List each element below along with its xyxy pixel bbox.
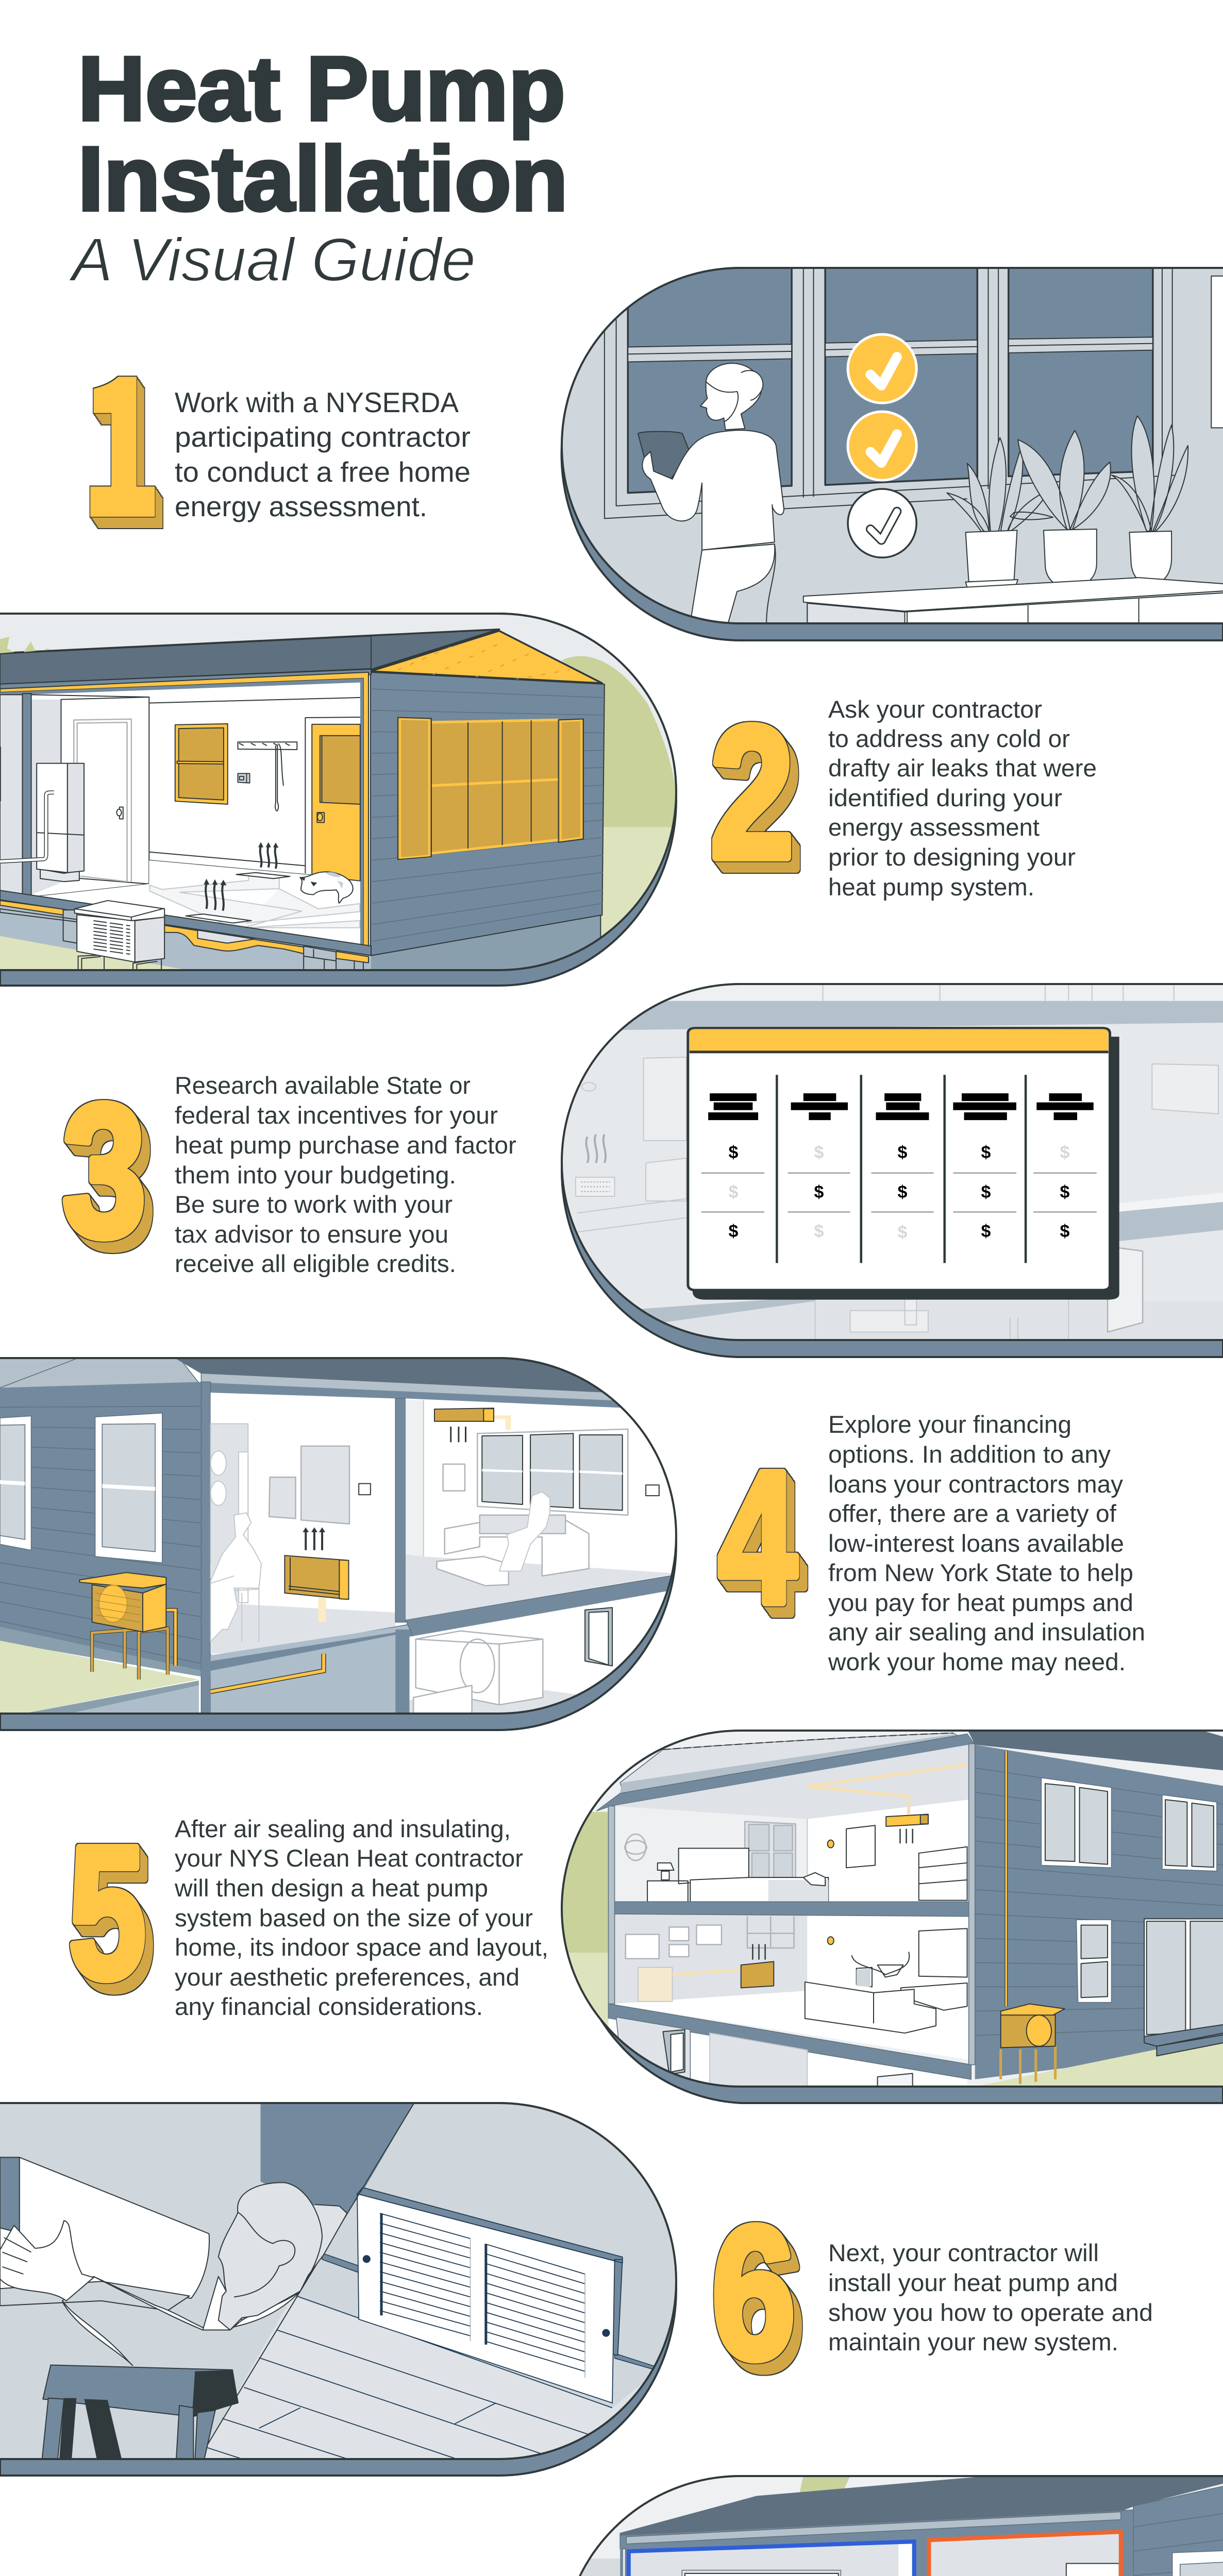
coat rack and thermostat <box>238 742 297 811</box>
console unit <box>284 1555 348 1599</box>
step 4 text: options. In addition to any <box>828 1440 1111 1468</box>
outdoor heat pump unit <box>79 1572 176 1680</box>
facade with siding <box>0 1382 201 1714</box>
roof <box>0 630 602 687</box>
person with tablet <box>638 363 784 647</box>
step 3 text: receive all eligible credits. <box>175 1250 456 1277</box>
step 2 text: energy assessment <box>828 814 1040 841</box>
tax table card <box>688 1028 1119 1300</box>
facade <box>371 672 605 989</box>
step 3 text: Research available State or <box>175 1072 471 1099</box>
step 6 text: Next, your contractor will <box>828 2239 1099 2266</box>
window <box>605 264 1223 518</box>
step 2 text: prior to designing your <box>828 843 1076 871</box>
back wall window <box>175 724 228 804</box>
floor slabs <box>608 1806 971 2094</box>
step 5 text <box>174 1815 548 2020</box>
facade with siding <box>969 1744 1223 2094</box>
title: Installation <box>78 128 568 230</box>
panel: step 4 illustration, financing house <box>0 1350 702 1739</box>
subtitle: A Visual Guide <box>69 226 476 294</box>
step 4 text: you pay for heat pumps and <box>828 1589 1133 1616</box>
step 2 text: heat pump system. <box>828 873 1034 901</box>
right room <box>406 1398 679 1620</box>
dollar signs: $ <box>898 1182 908 1202</box>
step 4 text: offer, there are a variety of <box>828 1500 1117 1527</box>
dollar signs: $ <box>729 1222 739 1241</box>
dollar signs: $ <box>729 1143 739 1162</box>
step 4 text: Explore your financing <box>828 1411 1071 1438</box>
step 1 text <box>175 386 471 522</box>
dollar signs: $ <box>1060 1143 1070 1162</box>
step 6 text: maintain your new system. <box>828 2328 1118 2355</box>
step 1 text: energy assessment. <box>175 490 427 522</box>
dollar signs: $ <box>981 1222 991 1241</box>
table <box>803 577 1223 622</box>
step ladder <box>42 2365 239 2459</box>
step 6 number: 6 <box>712 2188 795 2398</box>
roof edge <box>0 636 371 689</box>
foundation <box>0 890 371 970</box>
floor and ducts <box>31 860 360 944</box>
check marks <box>848 334 916 557</box>
title: Heat Pump <box>78 38 565 140</box>
step 3 text: federal tax incentives for your <box>175 1101 498 1129</box>
step 2 text: Ask your contractor <box>828 696 1042 723</box>
step 2 text: drafty air leaks that were <box>828 754 1097 782</box>
roof edge <box>597 1729 1223 1811</box>
roof <box>620 2477 1223 2549</box>
step 5 text: After air sealing and insulating, <box>175 1815 511 1842</box>
step 2 text: identified during your <box>828 784 1062 811</box>
dollar signs <box>729 1143 1070 1242</box>
step 5 text: any financial considerations. <box>175 1993 483 2020</box>
panel: step 5 illustration, two-storey house <box>546 1729 1223 2108</box>
step 3 text: them into your budgeting. <box>175 1161 456 1189</box>
water heater <box>0 764 84 882</box>
step 4 text <box>828 1411 1145 1675</box>
door <box>312 724 360 881</box>
step 3 text <box>175 1072 516 1277</box>
dollar signs: $ <box>814 1182 824 1202</box>
step 4 text: work your home may need. <box>828 1648 1126 1675</box>
step 4 text: from New York State to help <box>828 1559 1133 1586</box>
panel: step 2 illustration, insulated house <box>0 608 702 989</box>
step 5 text: system based on the size of your <box>175 1904 533 1931</box>
facade <box>1133 2481 1223 2576</box>
dollar signs: $ <box>814 1222 824 1241</box>
dollar signs: $ <box>729 1182 739 1202</box>
step 4 number: 4 <box>718 1433 798 1642</box>
dollar signs: $ <box>1060 1182 1070 1202</box>
step 1 text: Work with a NYSERDA <box>175 386 459 418</box>
step 5 number: 5 <box>69 1807 146 2018</box>
panel: step 6 illustration, installer and vent <box>0 2092 702 2481</box>
dollar signs: $ <box>814 1143 824 1162</box>
upper storey <box>612 1744 969 1902</box>
step 3 text: Be sure to work with your <box>175 1191 453 1218</box>
dollar signs: $ <box>898 1143 908 1162</box>
dollar signs: $ <box>898 1223 908 1242</box>
step 3 number: 3 <box>62 1066 146 1276</box>
step 5 text: your aesthetic preferences, and <box>175 1963 520 1991</box>
potted plants <box>947 416 1188 594</box>
floor <box>187 2296 679 2481</box>
step 3 text: heat pump purchase and factor <box>175 1131 516 1159</box>
exterior windows <box>0 1413 162 1563</box>
step 5 text: will then design a heat pump <box>174 1874 488 1902</box>
step 5 text: your NYS Clean Heat contractor <box>175 1844 523 1872</box>
step 4 text: any air sealing and insulation <box>828 1618 1145 1646</box>
step 1 text: to conduct a free home <box>175 456 471 488</box>
step 6 text: show you how to operate and <box>828 2299 1153 2326</box>
refrigerant pipe and outdoor unit <box>1001 1751 1065 2084</box>
dog <box>300 872 353 903</box>
step 1 number: 1 <box>82 301 160 566</box>
outdoor unit <box>75 901 164 969</box>
exterior windows and door <box>1041 1778 1223 2056</box>
warm air arrows <box>186 842 290 923</box>
step 2 text <box>828 696 1097 901</box>
lower storey <box>612 1914 969 2060</box>
panel: step 1 illustration, home assessment <box>546 260 1223 654</box>
panel: step 7 illustration, thermostat rooms <box>546 2471 1223 2576</box>
step 1 text: participating contractor <box>175 421 471 453</box>
yellow window <box>398 718 583 859</box>
central column and floor slab <box>201 1398 679 1714</box>
dollar signs: $ <box>981 1143 991 1162</box>
orange room <box>930 2532 1121 2576</box>
dollar signs: $ <box>981 1182 991 1202</box>
title <box>78 38 568 230</box>
step 5 text: home, its indoor space and layout, <box>175 1934 548 1961</box>
room interior <box>0 672 368 946</box>
step 6 text <box>828 2239 1153 2355</box>
roof and beams <box>0 1358 628 1409</box>
blue room walls <box>630 2541 914 2576</box>
step 4 text: low-interest loans available <box>828 1530 1124 1557</box>
sky and foliage behind roof <box>0 637 51 653</box>
installer and unit <box>0 2157 347 2365</box>
split line <box>199 2103 414 2459</box>
step 2 text: to address any cold or <box>828 725 1070 752</box>
step 6 text: install your heat pump and <box>828 2269 1118 2296</box>
step 4 text: loans your contractors may <box>828 1470 1124 1498</box>
panel: step 3 illustration, tax incentives table <box>546 979 1223 1357</box>
basement room <box>410 1589 679 1714</box>
structure <box>620 2520 1133 2576</box>
vent cover <box>322 2188 655 2403</box>
upper left room <box>201 1382 395 1714</box>
step 2 number: 2 <box>710 688 794 897</box>
step 3 text: tax advisor to ensure you <box>175 1221 448 1248</box>
window <box>682 2570 888 2576</box>
dollar signs: $ <box>1060 1222 1070 1241</box>
